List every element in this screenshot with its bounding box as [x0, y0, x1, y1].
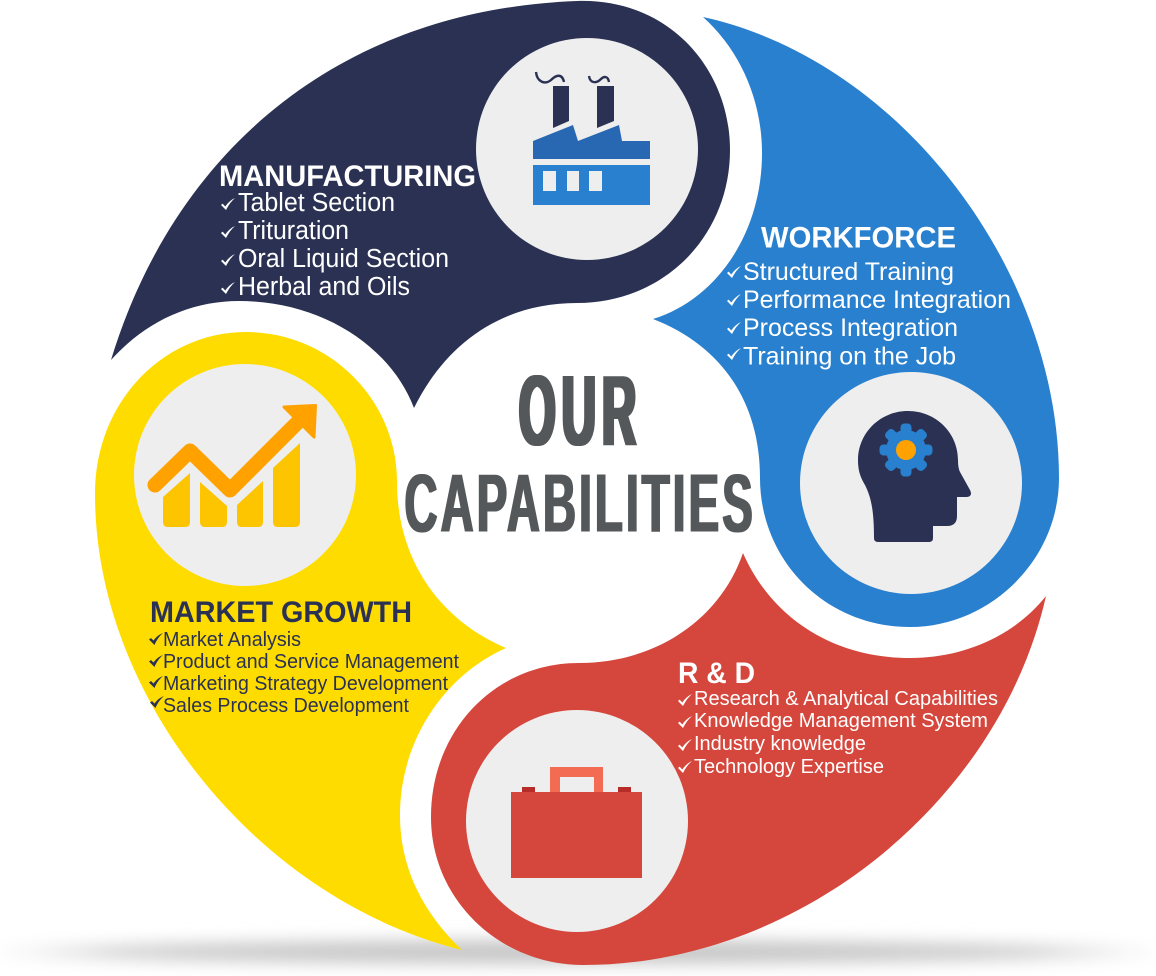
icon circle: [800, 372, 1022, 594]
list: r and d: Industry knowledge: [694, 732, 866, 755]
list: workforce: Structured Training: [743, 258, 954, 286]
list: workforce: Process Integration: [743, 314, 958, 342]
panel: workforce: [653, 17, 1059, 627]
list: manufacturing: Herbal and Oils: [238, 273, 410, 301]
list: market growth: Market Analysis: [163, 629, 301, 651]
heading: manufacturing: MANUFACTURING: [219, 160, 476, 193]
list: manufacturing: [221, 189, 449, 301]
navy petal: [111, 1, 730, 408]
heading: workforce: WORKFORCE: [761, 222, 956, 254]
list: r and d: Technology Expertise: [694, 755, 884, 778]
list: market growth: Product and Service Management: [163, 651, 459, 673]
icon: briefcase: [511, 767, 642, 878]
yellow petal: [95, 332, 506, 950]
panel: manufacturing: [111, 1, 730, 408]
panel: r and d: [431, 553, 1046, 965]
panel: market growth: [95, 332, 506, 950]
blue petal: [653, 17, 1059, 627]
list: r and d: [678, 687, 998, 778]
list: manufacturing: Trituration: [238, 217, 349, 245]
icon: factory: [533, 72, 650, 205]
icon: head with gear: [858, 411, 971, 542]
icon circle: [466, 710, 688, 932]
icon: growth chart: [155, 406, 316, 527]
title: CAPABILITIES: [404, 457, 753, 550]
list: market growth: Marketing Strategy Development: [163, 673, 448, 695]
list: manufacturing: Tablet Section: [238, 189, 395, 217]
list: market growth: [149, 629, 459, 717]
list: workforce: Performance Integration: [743, 286, 1011, 314]
heading: r and d: R & D: [678, 657, 755, 690]
heading: market growth: MARKET GROWTH: [150, 596, 412, 629]
icon circle: [476, 38, 698, 260]
red petal: [431, 553, 1046, 965]
title: OUR: [519, 354, 636, 467]
list: manufacturing: Oral Liquid Section: [238, 245, 449, 273]
list: workforce: [727, 258, 1011, 370]
list: r and d: Research & Analytical Capabilities: [694, 687, 998, 710]
list: r and d: Knowledge Management System: [694, 709, 988, 732]
icon circle: [134, 364, 356, 586]
list: workforce: Training on the Job: [743, 342, 956, 370]
list: market growth: Sales Process Development: [163, 695, 409, 717]
title: [404, 354, 753, 550]
ground shadow: [0, 938, 1156, 966]
